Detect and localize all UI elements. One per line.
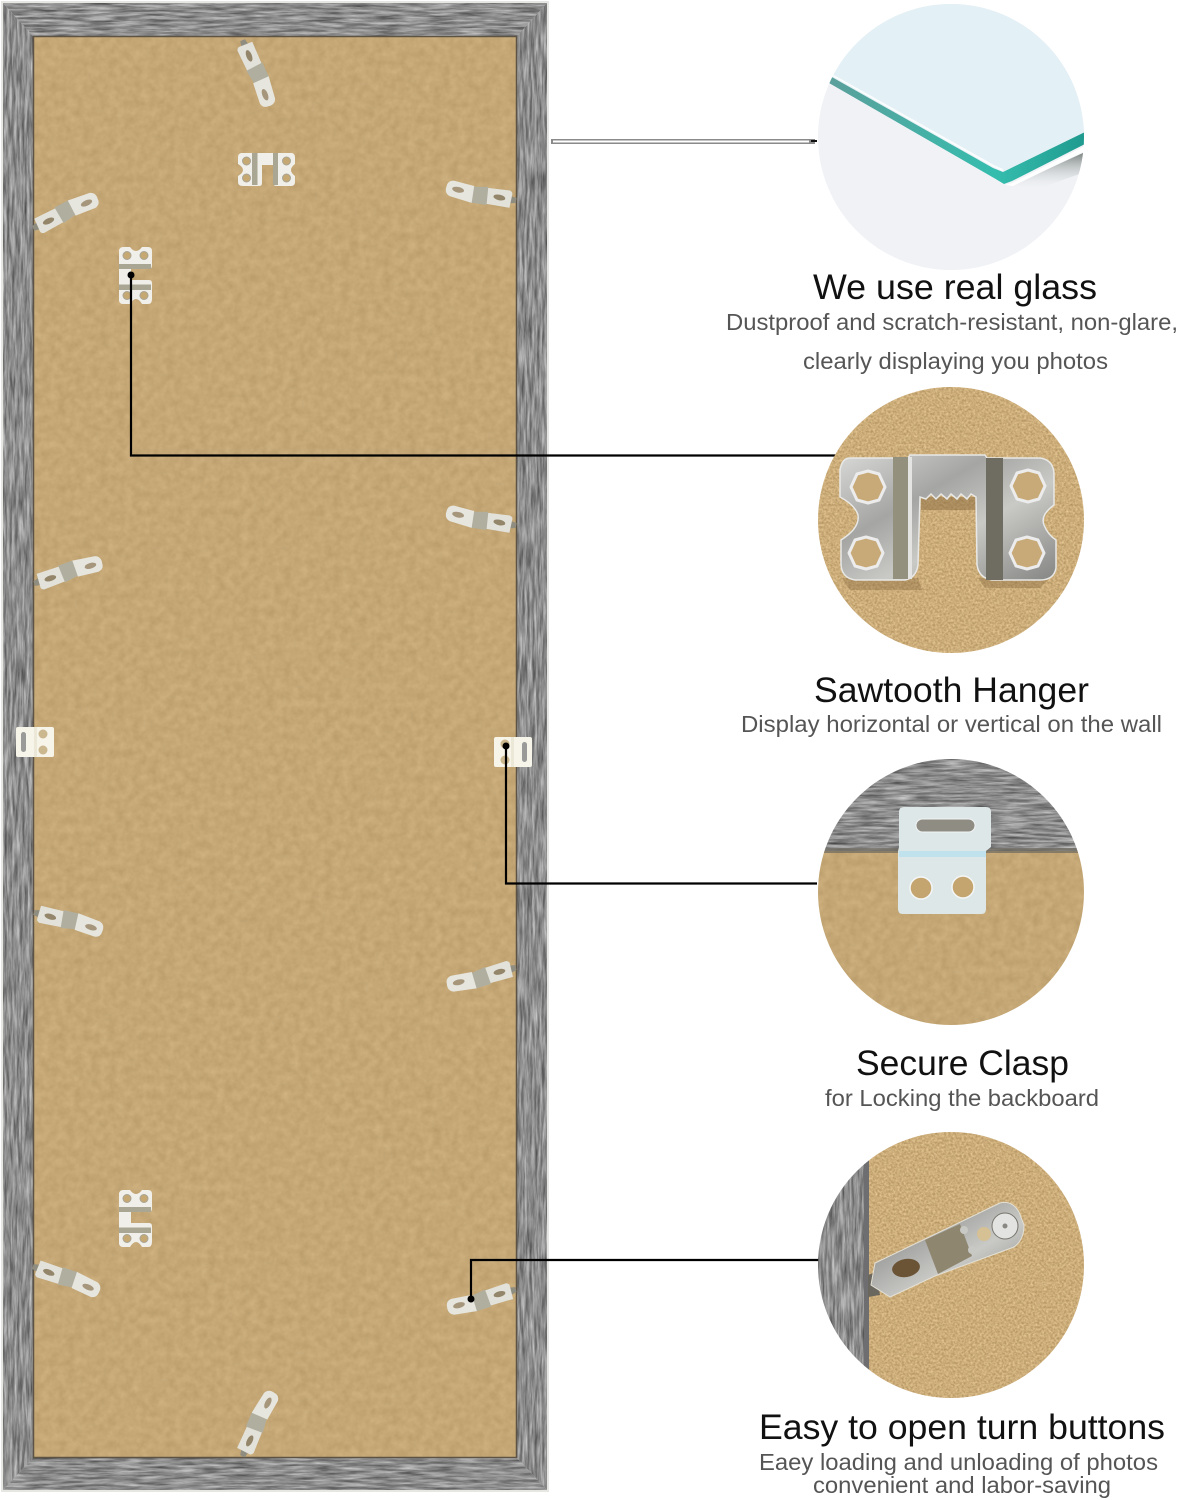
text: turn button description line 2: convenient and labor-saving: [813, 1472, 1111, 1498]
text: clasp description: for Locking the backboard: [825, 1085, 1099, 1111]
icon: secure clasp circle: [818, 759, 1085, 1026]
heading: turn buttons: Easy to open turn buttons: [759, 1408, 1165, 1447]
text: sawtooth description: Display horizontal or vertical on the wall: [741, 711, 1162, 737]
connector: sawtooth hanger: [128, 272, 836, 456]
heading: real glass: We use real glass: [813, 268, 1097, 307]
frame moulding: [1, 1, 549, 1492]
kraft backing board: [33, 36, 517, 1458]
panel: picture frame back: [1, 1, 549, 1492]
icon: glass circle: [818, 4, 1085, 271]
connector: secure clasp: [502, 742, 817, 884]
text: glass description line 2: clearly displaying you photos: [803, 348, 1108, 374]
heading: secure clasp: Secure Clasp: [856, 1044, 1069, 1083]
icon: turn button circle: [818, 1132, 1085, 1399]
connector: turn buttons: [468, 1260, 822, 1302]
text: glass description line 1: Dustproof and scratch-resistant, non-glare,: [726, 309, 1178, 335]
icon: sawtooth hanger circle: [818, 387, 1085, 654]
sawtooth hangers: [119, 153, 295, 1247]
side clasps: [16, 727, 532, 767]
turn buttons: [29, 36, 519, 1460]
heading: sawtooth hanger: Sawtooth Hanger: [814, 671, 1089, 710]
connector: glass: [551, 139, 817, 144]
text: turn button description line 1: Eaey loading and unloading of photos: [759, 1449, 1158, 1475]
